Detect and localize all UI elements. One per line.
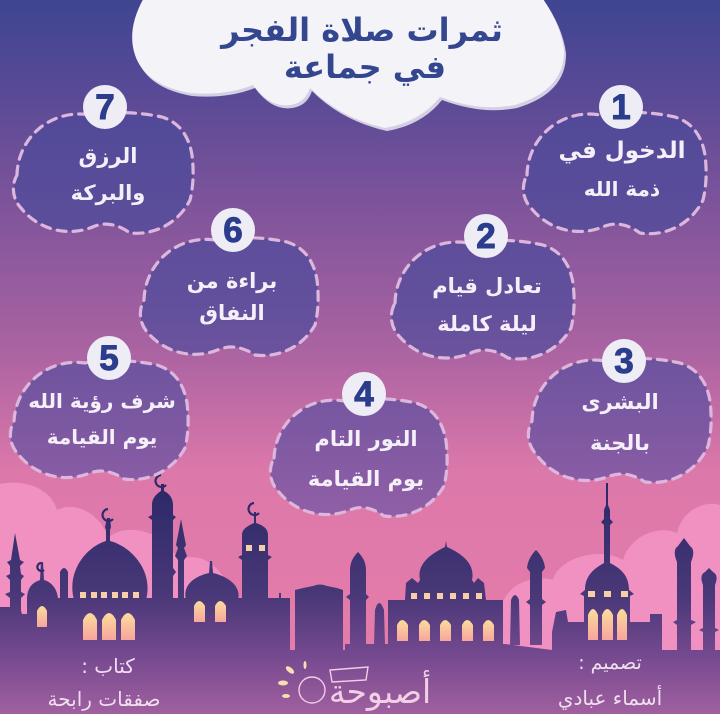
panel: item 2: 2 [476, 217, 496, 256]
minaret six [374, 603, 385, 645]
panel: item 3 [528, 339, 711, 483]
turret [60, 568, 68, 600]
palace [388, 541, 503, 645]
panel: item 3: 3 [614, 342, 634, 381]
panel: item 7: والبركة [71, 181, 145, 205]
dome three [185, 561, 239, 600]
small dome [27, 562, 58, 620]
panel: item 3: البشرى [581, 390, 659, 414]
credit: book: صفقات رابحة [48, 687, 160, 711]
panel: item 4: 4 [354, 375, 374, 414]
tall minaret [148, 484, 176, 610]
panel: item 1: الدخول في [558, 138, 686, 164]
panel: item 7 [13, 85, 193, 233]
panel: item 6: براءة من [187, 269, 277, 293]
panel: item 5 [10, 336, 188, 480]
pink background clouds [0, 483, 720, 650]
minaret seven [510, 595, 520, 645]
panel: item 1: ذمة الله [584, 177, 660, 201]
building [295, 584, 343, 650]
panel: item 6: النفاق [199, 301, 265, 325]
ground [0, 598, 720, 714]
panel: item 2: تعادل قيام [432, 274, 542, 298]
panel: item 3: بالجنة [590, 431, 650, 455]
logo: sunrise wordmark: أصبوحة [329, 670, 431, 711]
panel: item 7: 7 [95, 88, 115, 127]
panel: item 4: النور التام [314, 427, 418, 451]
panel: item 2 [391, 214, 574, 359]
panel: item 4 [270, 372, 447, 517]
thin minaret [175, 519, 187, 610]
minaret far left [5, 533, 25, 612]
minaret five [346, 552, 369, 650]
panel: item 1: 1 [611, 88, 631, 127]
panel: item 2: ليلة كاملة [437, 312, 537, 336]
minaret eight [526, 550, 546, 645]
crescents [37, 475, 259, 571]
panel: item 5: شرف رؤية الله [28, 389, 176, 413]
mosque windows [37, 545, 628, 641]
title text: ثمرات صلاة الفجر [219, 11, 503, 49]
panel: item 6 [140, 208, 318, 356]
title cloud: في جماعة [284, 48, 446, 86]
minaret ten [699, 568, 719, 650]
credit: designer [558, 652, 662, 711]
title cloud [132, 0, 566, 131]
credit: designer: تصميم : [578, 652, 642, 674]
credit: book [48, 654, 160, 711]
logo: sunrise wordmark [278, 661, 431, 711]
main right mosque [552, 483, 662, 650]
minaret nine [673, 538, 696, 650]
panel: item 7: الرزق [78, 144, 138, 168]
credit: book: كتاب : [81, 654, 135, 678]
panel: item 6: 6 [223, 211, 243, 250]
panel: item 5: يوم القيامة [47, 425, 157, 449]
right tower [238, 512, 272, 610]
skyline silhouette [0, 483, 720, 714]
credit: designer: أسماء عبادي [558, 685, 662, 711]
panel: item 5: 5 [99, 339, 119, 378]
small dome four [270, 593, 290, 650]
panel: item 4: يوم القيامة [308, 467, 424, 491]
panel: item 1 [523, 85, 706, 234]
big dome [72, 518, 148, 600]
